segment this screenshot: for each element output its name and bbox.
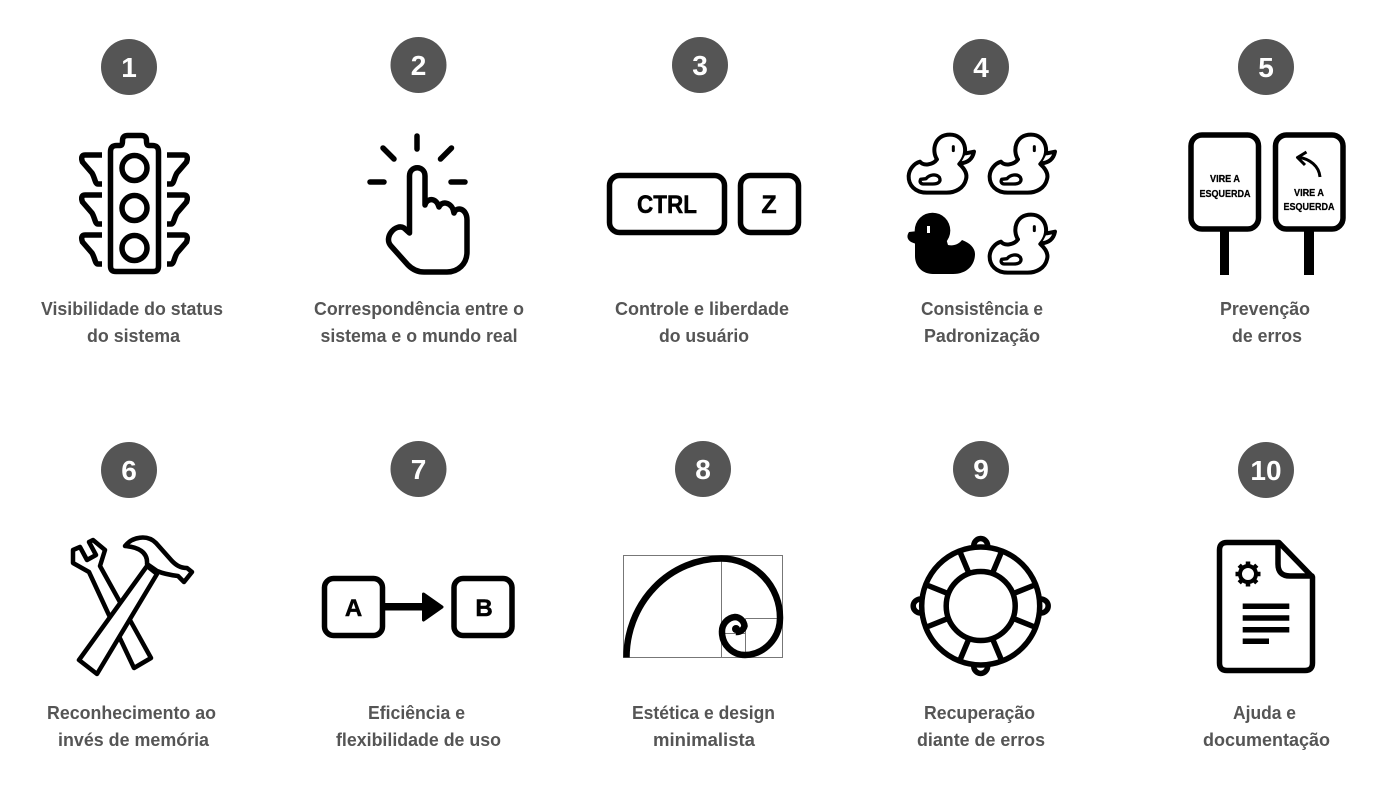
panel: 10 Ajuda e documentação <box>1203 442 1330 750</box>
icon: two road signs: ESQUERDA <box>1200 188 1251 200</box>
label 7 <box>336 703 501 750</box>
label 6: Reconhecimento ao <box>47 703 216 723</box>
label 6 <box>47 703 216 750</box>
badge 4: 4 <box>973 52 989 83</box>
panel: 7 Eficiência e flexibilidade de uso <box>324 441 512 750</box>
icon: CTRL Z keys: CTRL <box>637 191 697 219</box>
badge 8 <box>675 441 731 497</box>
label 4 <box>921 299 1043 346</box>
icon: two road signs: VIRE A <box>1210 173 1240 185</box>
label 5: de erros <box>1232 326 1302 346</box>
label 9 <box>917 703 1045 750</box>
badge 1: 1 <box>121 52 137 83</box>
label 7: Eficiência e <box>368 703 465 723</box>
label 2 <box>314 299 524 346</box>
badge 7: 7 <box>411 454 426 485</box>
panel: 3 Controle e liberdade do usuário <box>610 37 798 346</box>
icon: pointing hand with rays <box>370 136 467 272</box>
icon: document with gear <box>1220 542 1312 670</box>
panel: 9 Recuperação diante de erros <box>913 441 1048 750</box>
icon: wrench and hammer <box>73 538 192 674</box>
icon: two road signs <box>1191 135 1343 275</box>
label 5 <box>1220 299 1310 346</box>
badge 1 <box>101 39 157 95</box>
icon: lifebuoy <box>913 538 1048 674</box>
label 3: do usuário <box>659 326 749 346</box>
panel: 5 Prevenção de erros <box>1191 39 1343 346</box>
icon: two road signs: VIRE A <box>1294 187 1324 199</box>
panel: 4 Consistência e Padronização <box>907 39 1055 346</box>
badge 7 <box>390 441 446 497</box>
label 1: Visibilidade do status <box>41 299 223 319</box>
panel: 6 Reconhecimento ao invés de memória <box>47 442 216 750</box>
label 8 <box>632 703 775 750</box>
label 8: minimalista <box>653 730 756 750</box>
panel: 2 Correspondência entre o sistema e o mundo real <box>314 37 524 346</box>
badge 10: 10 <box>1250 455 1282 486</box>
icon: CTRL Z keys <box>610 176 798 232</box>
panel: 8 Estética e design minimalista <box>624 441 782 750</box>
label 3: Controle e liberdade <box>615 299 789 319</box>
label 9: diante de erros <box>917 730 1045 750</box>
badge 3: 3 <box>692 50 708 81</box>
label 10 <box>1203 703 1330 750</box>
badge 5: 5 <box>1258 52 1274 83</box>
label 6: invés de memória <box>58 730 210 750</box>
icon: A to B flow: B <box>475 595 493 622</box>
panel: 1 Visibilidade do status do sistema <box>41 39 223 346</box>
label 10: documentação <box>1203 730 1330 750</box>
badge 6 <box>101 442 157 498</box>
badge 2 <box>390 37 446 93</box>
icon: A to B flow <box>324 578 512 636</box>
badge 9: 9 <box>973 454 989 485</box>
badge 6: 6 <box>121 455 137 486</box>
icon: golden spiral <box>624 556 782 658</box>
label 8: Estética e design <box>632 703 775 723</box>
icon: four ducks, one black <box>907 135 1055 274</box>
label 2: sistema e o mundo real <box>320 326 518 346</box>
icon: traffic light <box>82 136 187 272</box>
icon: A to B flow: A <box>345 595 362 622</box>
badge 9 <box>953 441 1009 497</box>
label 1: do sistema <box>87 326 181 346</box>
label 7: flexibilidade de uso <box>336 730 501 750</box>
badge 2: 2 <box>411 50 426 81</box>
badge 5 <box>1238 39 1294 95</box>
label 9: Recuperação <box>924 703 1035 723</box>
label 1 <box>41 299 223 346</box>
label 5: Prevenção <box>1220 299 1310 319</box>
label 4: Consistência e <box>921 299 1043 319</box>
badge 3 <box>672 37 728 93</box>
label 10: Ajuda e <box>1233 703 1296 723</box>
badge 4 <box>953 39 1009 95</box>
label 3 <box>615 299 789 346</box>
icon: CTRL Z keys: Z <box>761 191 777 219</box>
badge 10 <box>1238 442 1294 498</box>
label 4: Padronização <box>924 326 1040 346</box>
icon: two road signs: ESQUERDA <box>1284 201 1335 213</box>
badge 8: 8 <box>695 454 711 485</box>
label 2: Correspondência entre o <box>314 299 524 319</box>
